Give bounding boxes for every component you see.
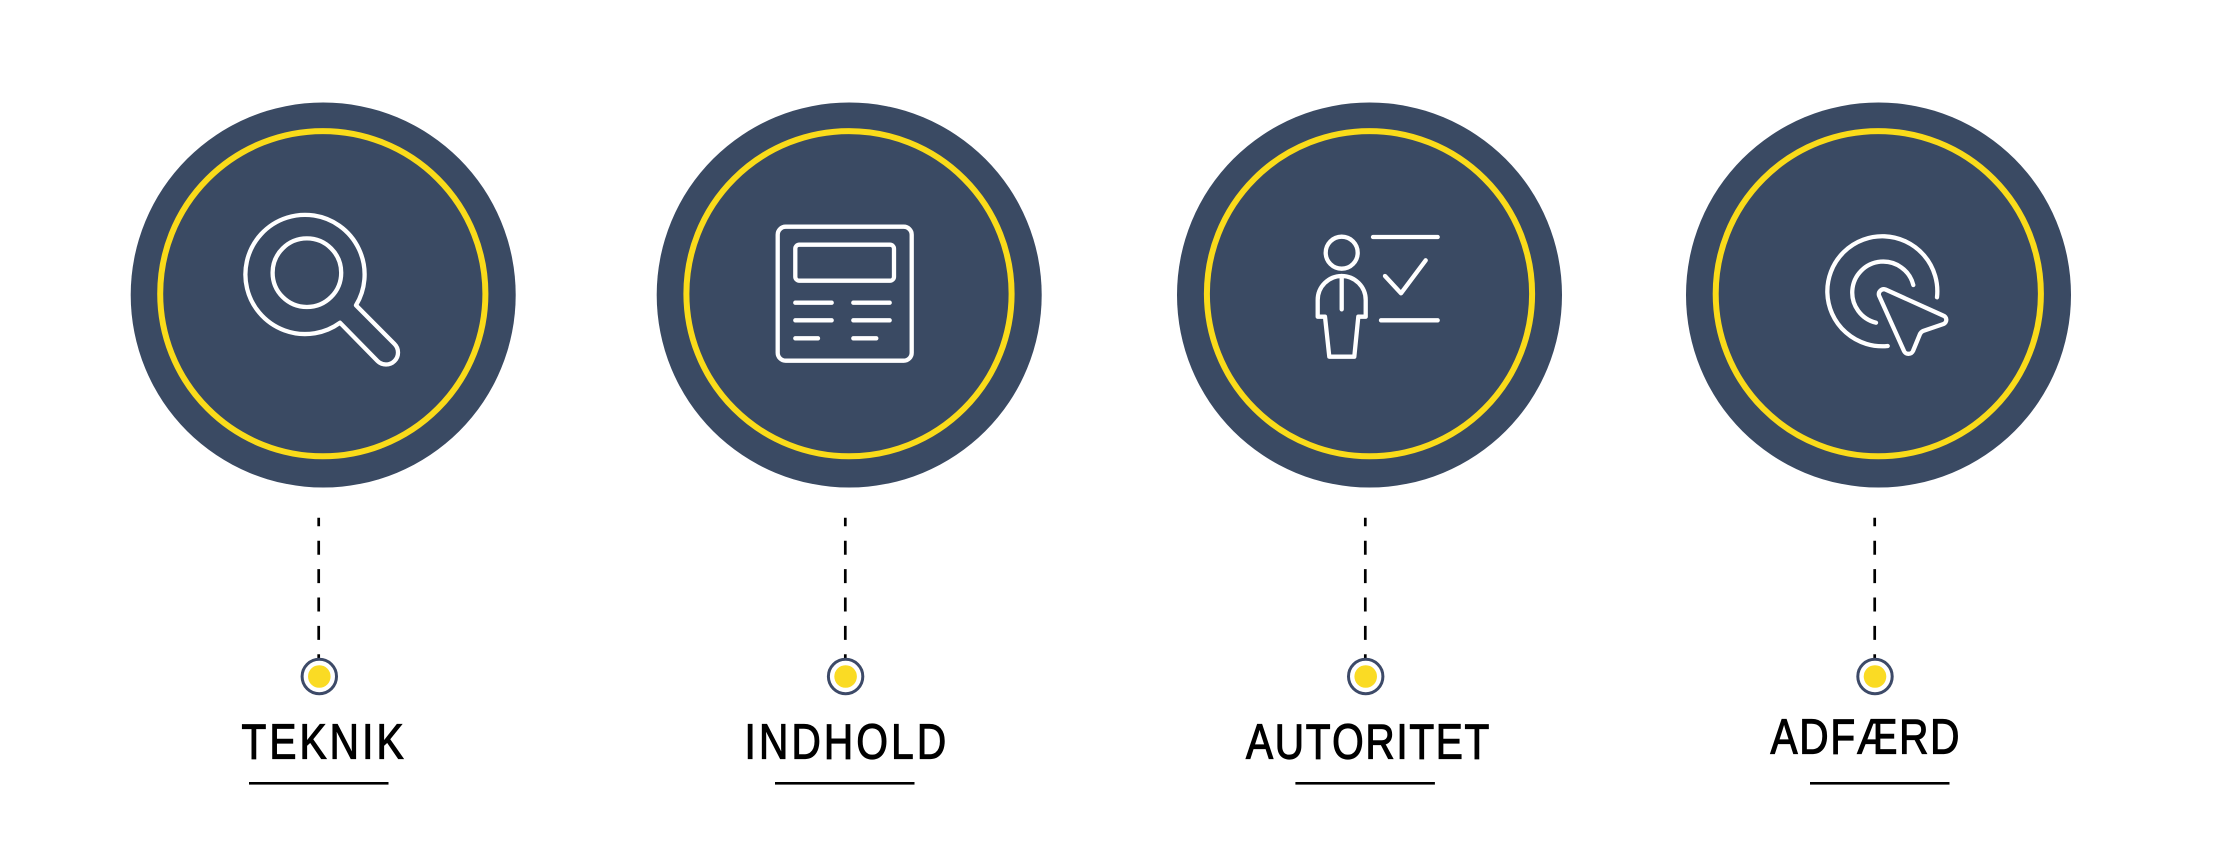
- marker dot: Teknik: [302, 659, 336, 694]
- marker dot: Indhold: [828, 659, 863, 694]
- panel: Autoritet: [1177, 102, 1562, 785]
- icon: document layout: [778, 227, 912, 361]
- underline: Teknik: [249, 782, 388, 785]
- marker dot: Autoritet: [1348, 659, 1383, 694]
- icon: magnifying glass: [245, 215, 398, 365]
- underline: Autoritet: [1295, 782, 1435, 785]
- panel: Teknik: [131, 102, 516, 785]
- icon: person with checklist: [1318, 237, 1438, 357]
- marker dot: Adfærd: [1858, 659, 1892, 694]
- label: Adfærd: ADFÆRD: [1770, 709, 1960, 764]
- label: Teknik: TEKNIK: [242, 714, 404, 770]
- dashed connector: Autoritet: [1364, 518, 1367, 659]
- dashed connector: Indhold: [844, 518, 847, 659]
- dashed connector: Teknik: [317, 518, 320, 659]
- underline: Adfærd: [1810, 782, 1950, 785]
- icon: cursor clicking target: [1827, 236, 1946, 354]
- label: Autoritet: AUTORITET: [1246, 714, 1489, 770]
- panel: Adfærd: [1686, 102, 2071, 785]
- circle badge: Adfærd: [1686, 102, 2071, 488]
- label: Indhold: INDHOLD: [744, 714, 946, 770]
- panel: Indhold: [657, 102, 1042, 785]
- underline: Indhold: [775, 782, 914, 785]
- circle badge: Teknik: [131, 102, 516, 488]
- dashed connector: Adfærd: [1873, 518, 1876, 659]
- circle badge: Autoritet: [1177, 102, 1562, 488]
- circle badge: Indhold: [657, 102, 1042, 488]
